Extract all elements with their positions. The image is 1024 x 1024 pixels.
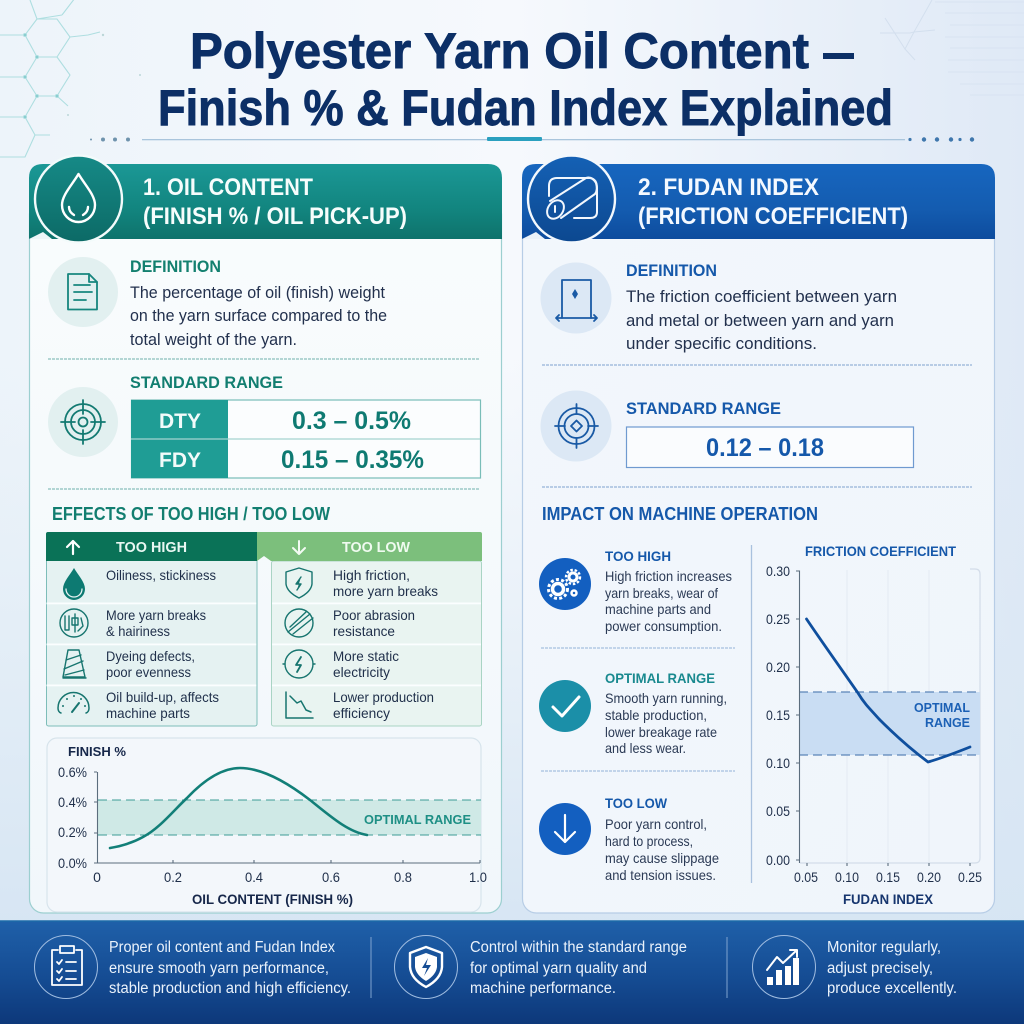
footer item: growth chart: adjust precisely,	[827, 960, 933, 977]
definition: The percentage of oil (finish) weight	[130, 284, 385, 302]
panel header banner	[522, 156, 995, 242]
column: too high	[46, 532, 257, 726]
column: too high: Oil build-up, affects	[106, 689, 219, 705]
definition: The friction coefficient between yarn	[626, 288, 897, 306]
chart: finish percent: 0.2%	[58, 824, 87, 840]
header text: (FINISH % / OIL PICK-UP)	[143, 203, 407, 230]
chart: finish percent: 0	[93, 869, 101, 885]
chart: friction coefficient: 0.15	[766, 707, 790, 723]
icon: broken yarn	[60, 609, 88, 637]
footer item: growth chart: produce excellently.	[827, 980, 957, 997]
item: too high	[539, 548, 732, 634]
chart: friction coefficient: 0.05	[794, 869, 818, 885]
item: too low: hard to process,	[605, 833, 693, 849]
item: too low: TOO LOW	[605, 795, 668, 811]
chart: finish percent: 0.8	[394, 869, 412, 885]
item: optimal range: stable production,	[605, 707, 707, 723]
title: Polyester Yarn Oil Content	[190, 23, 809, 79]
item: optimal range: Smooth yarn running,	[605, 690, 727, 706]
standard range: 0.12 – 0.18	[706, 434, 824, 462]
standard range table: FDY	[159, 449, 201, 472]
footer item: clipboard: ensure smooth yarn performance,	[109, 960, 329, 977]
chart: friction coefficient: 0.00	[766, 852, 790, 868]
footer band	[0, 921, 1024, 1024]
standard range table: 0.3 – 0.5%	[292, 407, 411, 435]
column: too low: Lower production	[333, 689, 434, 705]
column: too low: resistance	[333, 623, 395, 639]
header text: 2. FUDAN INDEX	[638, 174, 819, 201]
chart: friction coefficient: RANGE	[925, 715, 970, 730]
panel header banner	[29, 156, 502, 242]
chart: friction coefficient: 0.10	[835, 869, 859, 885]
header text: 1. OIL CONTENT	[143, 174, 313, 201]
item: optimal range: OPTIMAL RANGE	[605, 670, 715, 686]
header text: (FRICTION COEFFICIENT)	[638, 203, 908, 230]
chart: friction coefficient: FUDAN INDEX	[843, 891, 934, 907]
chart: friction coefficient: 0.10	[766, 755, 790, 771]
footer item: growth chart	[752, 936, 957, 998]
footer item: growth chart: Monitor regularly,	[827, 939, 941, 956]
chart: finish percent: OIL CONTENT (FINISH %)	[192, 892, 353, 907]
panel body	[30, 200, 502, 913]
item: too low: and tension issues.	[605, 867, 716, 883]
header text	[143, 174, 407, 230]
chart: friction coefficient: 0.30	[766, 563, 790, 579]
chart: finish percent: 0.6	[322, 869, 340, 885]
chart: friction coefficient: OPTIMAL	[914, 700, 970, 715]
column: too high: TOO HIGH	[116, 540, 187, 556]
icon: yarn roll	[544, 178, 597, 222]
chart: finish percent: 0.4	[245, 869, 263, 885]
panel body	[522, 200, 994, 913]
header text	[638, 174, 908, 230]
definition: on the yarn surface compared to the	[130, 307, 387, 325]
item: optimal range: and less wear.	[605, 740, 686, 756]
too high arrow	[67, 541, 79, 554]
item: too high: yarn breaks, wear of	[605, 585, 718, 601]
icon: gauge	[58, 692, 89, 713]
column: too low: Poor abrasion	[333, 607, 415, 623]
chart: friction coefficient: 0.20	[766, 659, 790, 675]
too low arrow	[293, 541, 305, 554]
standard range table	[131, 400, 480, 478]
chart: finish percent: 0.4%	[58, 794, 87, 810]
decoration: hexagon network	[0, 0, 141, 157]
item: too high: machine parts and	[605, 601, 711, 617]
column: too low: TOO LOW	[342, 540, 410, 556]
item: too high: High friction increases	[605, 568, 732, 584]
standard range table: 0.15 – 0.35%	[281, 446, 424, 474]
chart: friction coefficient: 0.15	[876, 869, 900, 885]
icon: target	[540, 390, 612, 462]
chart: friction coefficient	[766, 543, 982, 907]
icon: document	[48, 257, 118, 327]
item: too low: Poor yarn control,	[605, 816, 707, 832]
standard range	[626, 399, 914, 468]
chart: finish percent: 0.2	[164, 869, 182, 885]
icon: abrasion	[285, 609, 313, 637]
column: too high: Oiliness, stickiness	[106, 567, 216, 583]
icon: yarn cone	[63, 650, 86, 678]
definition: DEFINITION	[626, 261, 717, 280]
icon: solid drop	[63, 568, 85, 600]
footer item: clipboard: stable production and high efficiency.	[109, 980, 351, 997]
item: too high: TOO HIGH	[605, 548, 671, 564]
column: too high: machine parts	[106, 705, 190, 721]
column: too high: & hairiness	[106, 623, 170, 639]
standard range heading: STANDARD RANGE	[130, 373, 283, 392]
footer item: shield: for optimal yarn quality and	[470, 960, 647, 977]
panel: fudan index	[522, 156, 995, 913]
impact heading: IMPACT ON MACHINE OPERATION	[542, 504, 818, 524]
title: Finish % & Fudan Index Explained	[158, 80, 893, 136]
icon: decline chart	[286, 692, 313, 718]
column: too low: efficiency	[333, 705, 390, 721]
title divider	[90, 137, 974, 142]
chart: friction coefficient: FRICTION COEFFICIENT	[805, 543, 956, 559]
panel: oil content	[29, 156, 502, 913]
item: too low	[539, 795, 719, 883]
footer item: shield: machine performance.	[470, 980, 616, 997]
column: too high: poor evenness	[106, 664, 191, 680]
chart: finish percent: 1.0	[469, 869, 487, 885]
footer item: clipboard	[34, 936, 351, 998]
column: too low: High friction,	[333, 567, 410, 583]
column: too low: more yarn breaks	[333, 583, 438, 599]
column: too high: More yarn breaks	[106, 607, 206, 623]
item: optimal range	[539, 670, 727, 756]
footer item: shield	[394, 936, 687, 998]
icon: oil drop	[62, 174, 95, 222]
chart: finish percent: OPTIMAL RANGE	[364, 812, 471, 827]
icon: shield	[286, 568, 312, 598]
chart: friction coefficient: 0.25	[958, 869, 982, 885]
column: too low	[257, 532, 482, 726]
standard range: STANDARD RANGE	[626, 399, 781, 418]
chart: finish percent: FINISH %	[68, 744, 126, 759]
chart: finish percent	[47, 738, 487, 912]
icon: static	[283, 650, 315, 678]
effects heading: EFFECTS OF TOO HIGH / TOO LOW	[52, 504, 330, 524]
chart: friction coefficient: 0.25	[766, 611, 790, 627]
decoration: molecule and lines top right	[880, 0, 1024, 95]
item: too high: power consumption.	[605, 618, 722, 634]
definition: under specific conditions.	[626, 335, 817, 353]
chart: finish percent: 0.0%	[58, 855, 87, 871]
chart: finish percent: 0.6%	[58, 764, 87, 780]
item: too low: may cause slippage	[605, 850, 719, 866]
definition: total weight of the yarn.	[130, 331, 297, 349]
definition: and metal or between yarn and yarn	[626, 312, 894, 330]
footer item: shield: Control within the standard range	[470, 939, 687, 956]
standard range table: DTY	[159, 410, 201, 433]
definition	[626, 261, 897, 353]
icon: target	[48, 387, 118, 457]
footer item: clipboard: Proper oil content and Fudan Index	[109, 939, 335, 956]
definition: DEFINITION	[130, 257, 221, 276]
chart: friction coefficient: 0.20	[917, 869, 941, 885]
column: too low: electricity	[333, 664, 390, 680]
chart: friction coefficient: 0.05	[766, 803, 790, 819]
column: too high: Dyeing defects,	[106, 648, 195, 664]
item: optimal range: lower breakage rate	[605, 724, 717, 740]
title	[158, 23, 893, 136]
column: too low: More static	[333, 648, 399, 664]
icon: friction block	[540, 262, 612, 334]
definition	[130, 257, 387, 349]
